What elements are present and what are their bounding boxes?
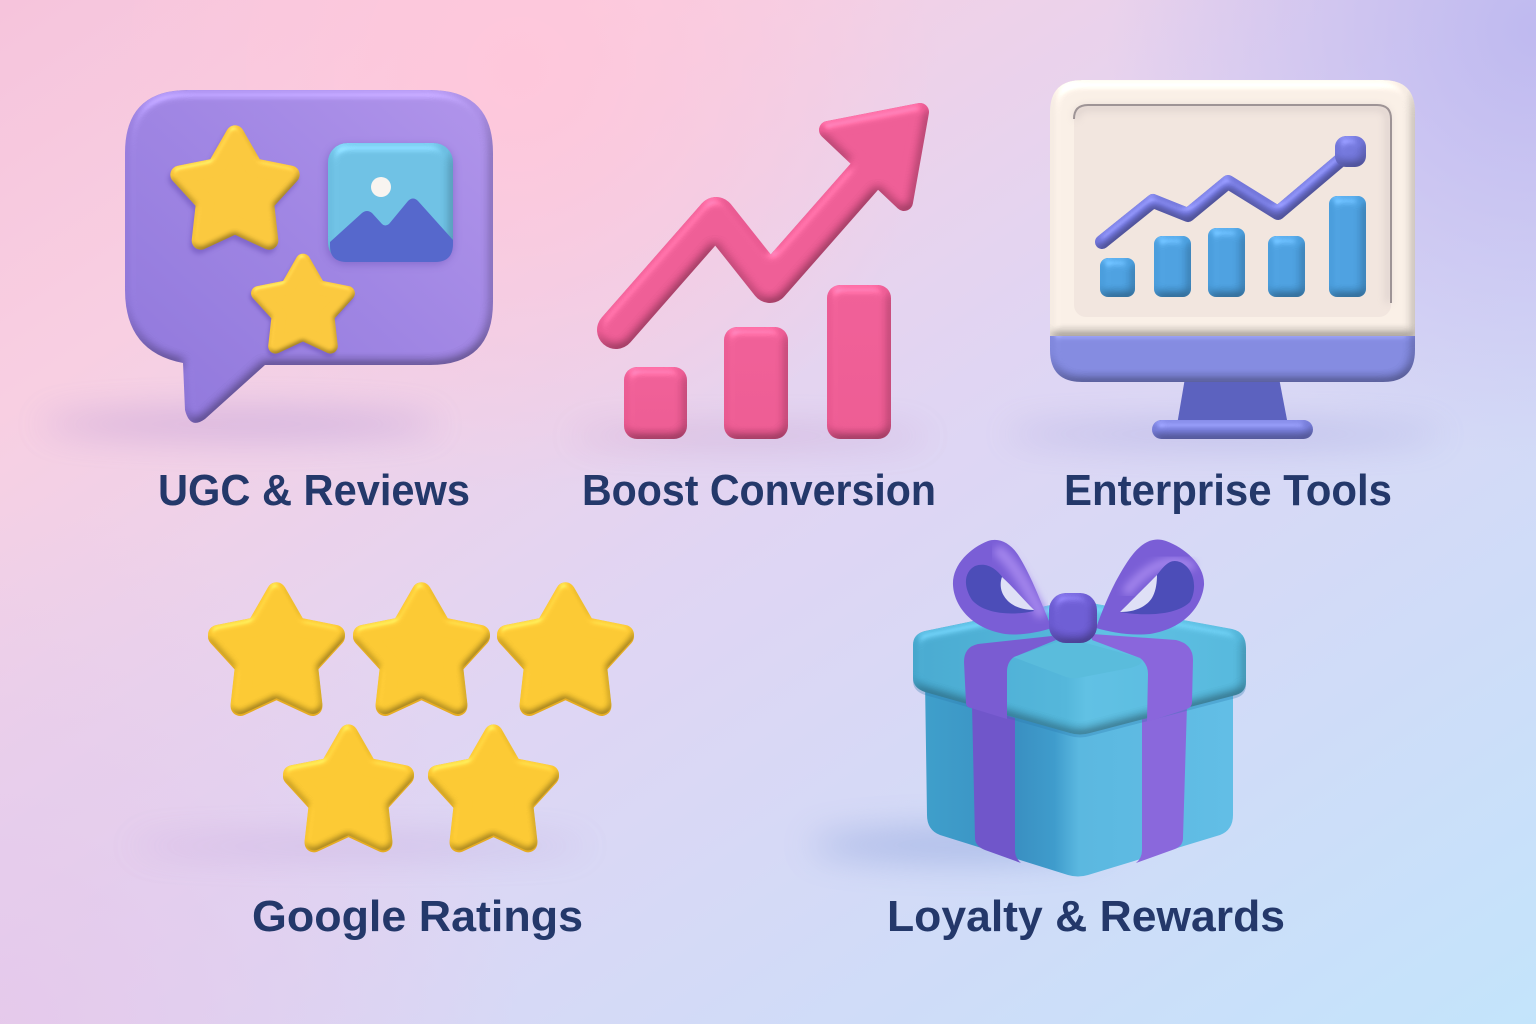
lid shadow bbox=[913, 603, 1246, 738]
bar chart bbox=[1100, 196, 1366, 297]
lid top facet bbox=[1013, 640, 1142, 678]
left loop interior bbox=[966, 565, 1034, 613]
icon: star 5 bbox=[437, 734, 550, 843]
icon: rising arrow bbox=[616, 112, 920, 330]
label: loyalty and rewards: Loyalty & Rewards bbox=[887, 892, 1285, 941]
icon: bar 2 bbox=[724, 327, 788, 439]
icon: bar 3 bbox=[827, 285, 891, 439]
ribbon on body, left bbox=[972, 705, 1021, 863]
label: boost conversion: Boost Conversion bbox=[582, 466, 936, 515]
panel: UGC and reviews bbox=[40, 90, 493, 438]
right loop opening bbox=[1120, 575, 1157, 612]
line chart bbox=[1102, 136, 1366, 242]
icon: image tile bbox=[326, 143, 454, 265]
panel: google ratings bbox=[130, 592, 624, 854]
right loop bbox=[1096, 540, 1204, 635]
right loop highlight bbox=[1128, 562, 1190, 590]
label: UGC and reviews: UGC & Reviews bbox=[158, 466, 470, 515]
icon: speech bubble bbox=[125, 90, 493, 423]
box body bbox=[925, 680, 1233, 876]
icon: gift box bbox=[913, 600, 1246, 876]
left loop highlight bbox=[1000, 552, 1040, 612]
icon: star 4 bbox=[292, 734, 405, 843]
panel: loyalty and rewards bbox=[810, 540, 1246, 876]
left loop opening bbox=[1001, 577, 1034, 610]
icon: monitor body bbox=[1050, 80, 1415, 382]
icon: small star bbox=[257, 261, 348, 350]
icon: monitor stand bbox=[1152, 378, 1313, 439]
icon: large star bbox=[178, 134, 291, 245]
panel: boost conversion bbox=[570, 112, 930, 444]
label: enterprise tools: Enterprise Tools bbox=[1064, 466, 1392, 515]
knot bbox=[1049, 593, 1097, 643]
icon: bow bbox=[953, 540, 1204, 643]
ribbon on lid, left bbox=[964, 636, 1056, 719]
label: google ratings: Google Ratings bbox=[252, 892, 583, 941]
box lid bbox=[913, 600, 1246, 734]
left loop bbox=[953, 540, 1052, 635]
panel: enterprise tools bbox=[1005, 80, 1445, 444]
icon: star 1 bbox=[218, 592, 335, 706]
ribbon on body, right bbox=[1136, 705, 1187, 863]
icon: star 3 bbox=[507, 592, 624, 706]
icon: bar 1 bbox=[624, 367, 687, 439]
ribbon on lid, right bbox=[1092, 634, 1193, 722]
right loop interior bbox=[1120, 561, 1194, 614]
icon: star 2 bbox=[363, 592, 480, 706]
